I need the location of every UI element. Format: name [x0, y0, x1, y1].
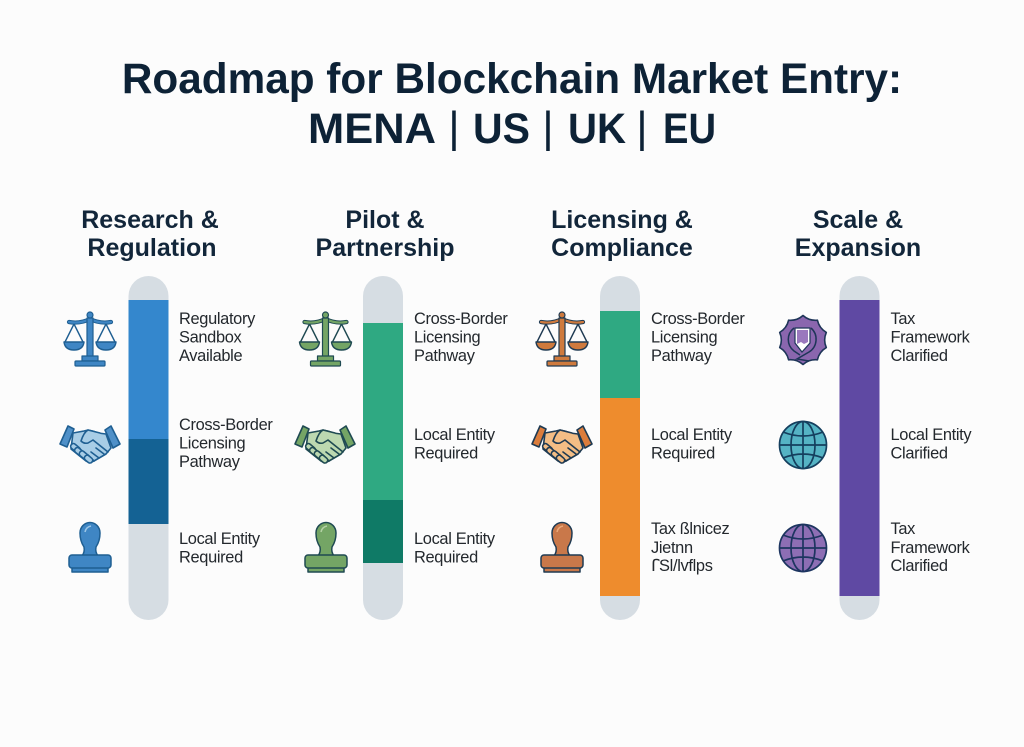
text: cross-border licensing pathway: Pathway [179, 453, 241, 471]
panel: licensing and compliance [532, 206, 745, 620]
icon: stamp [541, 522, 583, 572]
icon: scales of justice [300, 312, 352, 366]
heading: licensing and compliance: Licensing & [551, 206, 693, 234]
heading: licensing and compliance: Compliance [551, 234, 693, 262]
title: EU [663, 105, 716, 152]
text: cross-border licensing pathway: Licensing [651, 328, 717, 346]
title: | [542, 103, 554, 152]
text: cross-border licensing pathway: Licensing [179, 434, 245, 452]
progress bar: scale and expansion [840, 276, 880, 620]
heading: scale and expansion [795, 206, 921, 262]
icon: handshake [295, 426, 355, 464]
text: tax framework clarified: Clarified [890, 557, 948, 575]
text: garbled tax label: Jietnn [651, 539, 693, 557]
text: cross-border licensing pathway: Pathway [414, 347, 476, 365]
heading: research and regulation [81, 206, 219, 262]
progress bar: pilot and partnership [363, 276, 403, 620]
text: local entity required: Required [179, 548, 243, 566]
panel: research and regulation [60, 206, 273, 620]
heading: pilot and partnership: Partnership [316, 234, 454, 262]
title: | [636, 103, 648, 152]
title: | [448, 103, 460, 152]
title: MENA [308, 105, 436, 152]
text: cross-border licensing pathway [179, 416, 273, 471]
text: local entity required: Required [651, 444, 715, 462]
progress bar: research and regulation [128, 276, 168, 620]
panel: scale and expansion [780, 206, 972, 620]
text: regulatory sandbox available [179, 310, 256, 365]
text: cross-border licensing pathway: Pathway [651, 347, 713, 365]
icon: purple globe [780, 524, 826, 572]
progress bar: licensing and compliance [600, 276, 640, 620]
heading: scale and expansion: Scale & [813, 206, 903, 234]
icon: teal globe [780, 422, 826, 468]
text: tax framework clarified [890, 520, 971, 575]
text: local entity required [414, 530, 496, 566]
text: local entity clarified: Clarified [890, 444, 948, 462]
text: garbled tax label: ꓩSl/lvflps [651, 557, 713, 575]
text: tax framework clarified: Tax [890, 520, 916, 538]
icon: scales of justice [64, 312, 116, 366]
icon: scales of justice [536, 312, 588, 366]
text: tax framework clarified [890, 310, 971, 365]
text: cross-border licensing pathway [651, 310, 745, 365]
text: regulatory sandbox available: Available [179, 347, 242, 365]
icon: stamp [305, 522, 347, 572]
heading: scale and expansion: Expansion [795, 234, 921, 262]
text: regulatory sandbox available: Sandbox [179, 328, 243, 346]
panel: pilot and partnership [295, 206, 508, 620]
heading: pilot and partnership: Pilot & [345, 206, 425, 234]
text: tax framework clarified: Tax [890, 310, 916, 328]
text: garbled tax label: Tax ßlnicez [651, 520, 729, 538]
title [122, 55, 902, 152]
text: local entity clarified [890, 426, 972, 462]
text: local entity required: Local Entity [651, 426, 733, 444]
text: local entity clarified: Local Entity [890, 426, 972, 444]
heading: research and regulation: Regulation [87, 234, 217, 262]
title: US [473, 105, 530, 152]
icon: handshake [60, 426, 120, 464]
text: local entity required [651, 426, 733, 462]
text: local entity required: Local Entity [179, 530, 261, 548]
heading: licensing and compliance [551, 206, 693, 262]
text: cross-border licensing pathway [414, 310, 508, 365]
text: local entity required: Local Entity [414, 426, 496, 444]
text: local entity required: Required [414, 548, 478, 566]
title: Roadmap for Blockchain Market Entry: [122, 55, 902, 102]
text: garbled tax label [651, 520, 729, 575]
text: tax framework clarified: Framework [890, 539, 971, 557]
text: cross-border licensing pathway: Cross-Border [651, 310, 745, 328]
text: cross-border licensing pathway: Licensing [414, 328, 480, 346]
text: local entity required [179, 530, 261, 566]
text: local entity required: Local Entity [414, 530, 496, 548]
text: local entity required [414, 426, 496, 462]
heading: pilot and partnership [316, 206, 454, 262]
heading: research and regulation: Research & [81, 206, 219, 234]
text: tax framework clarified: Framework [890, 328, 971, 346]
text: cross-border licensing pathway: Cross-Border [414, 310, 508, 328]
text: tax framework clarified: Clarified [890, 347, 948, 365]
title: UK [568, 105, 626, 152]
icon: handshake [532, 426, 592, 464]
text: cross-border licensing pathway: Cross-Border [179, 416, 273, 434]
icon: badge [780, 316, 826, 364]
text: local entity required: Required [414, 444, 478, 462]
text: regulatory sandbox available: Regulatory [179, 310, 256, 328]
icon: stamp [69, 522, 111, 572]
